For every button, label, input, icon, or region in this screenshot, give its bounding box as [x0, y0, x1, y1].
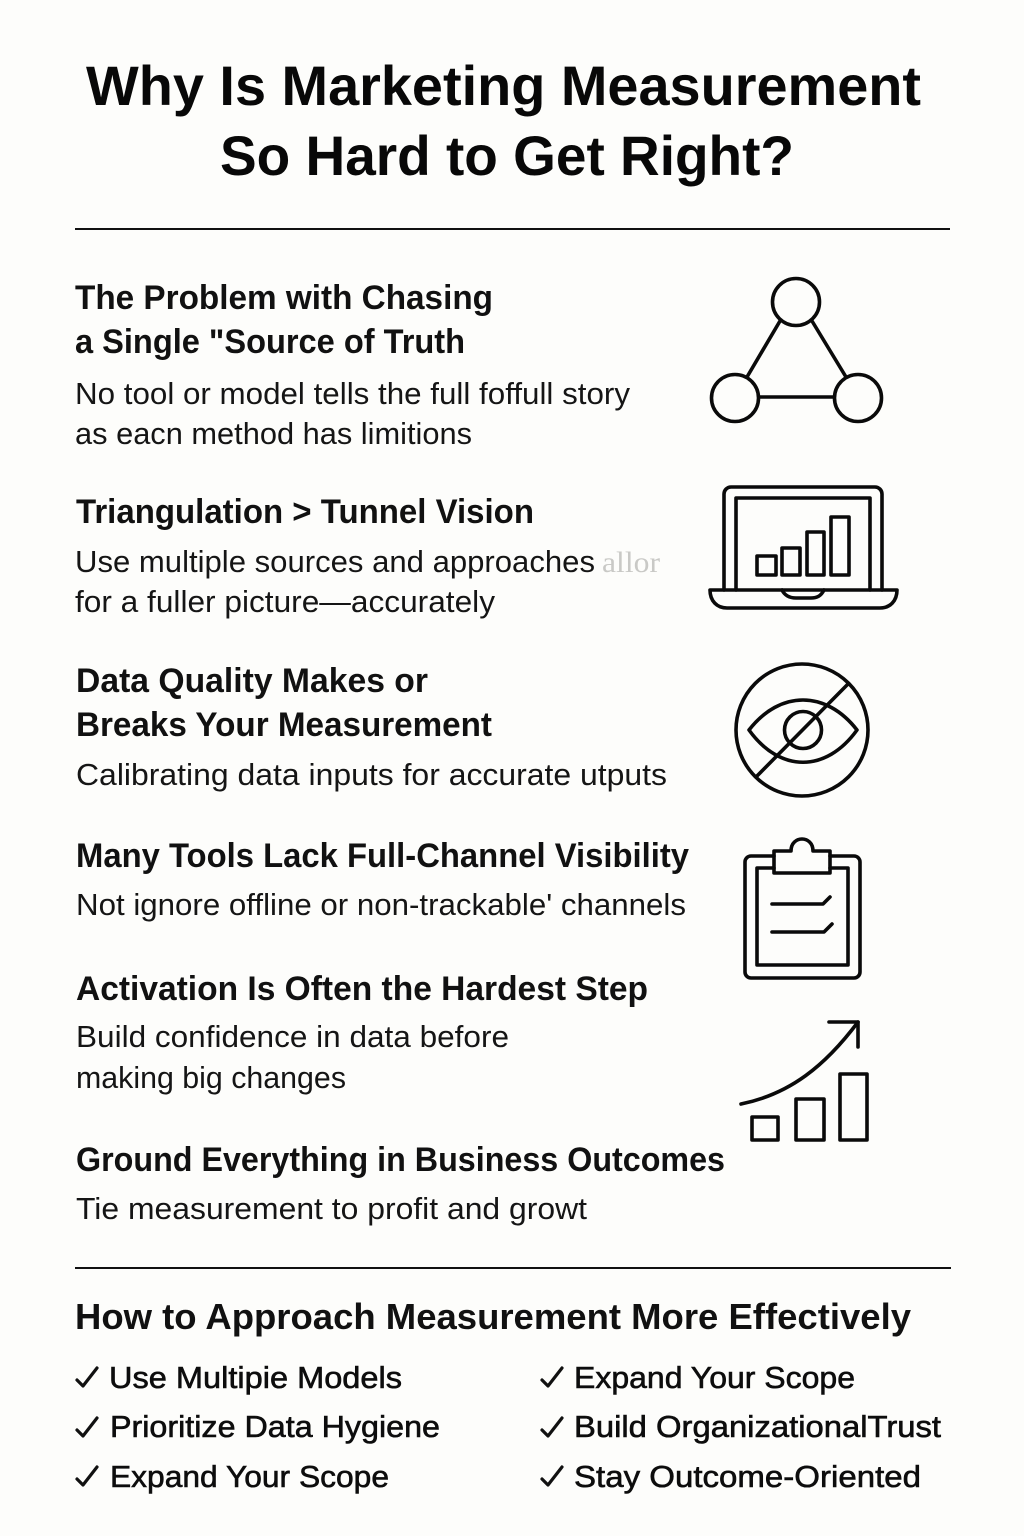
checklist item: expand your scope: Expand Your Scope [110, 1459, 389, 1494]
panel: how to approach measurement [75, 1296, 941, 1494]
title [86, 54, 921, 187]
heading: how to approach: How to Approach Measurement More Effectively [75, 1296, 911, 1337]
heading: data quality: Breaks Your Measurement [76, 706, 492, 744]
checklist item: prioritize data hygiene: Prioritize Data Hygiene [110, 1409, 440, 1444]
heading: triangulation: Triangulation > Tunnel Vision [76, 493, 534, 531]
body: full-channel visibility: Not ignore offline or non-trackable' channels [76, 887, 686, 922]
body: triangulation: for a fuller picture—accurately [75, 584, 496, 619]
body: single source of truth: No tool or model tells the full foffull story [75, 376, 630, 411]
icon: laptop with bar chart [710, 487, 897, 608]
icon: triangle network [712, 278, 882, 422]
heading: single source of truth: The Problem with Chasing [75, 279, 493, 317]
body: activation [76, 1019, 509, 1095]
section: business outcomes [76, 1141, 725, 1226]
body: triangulation [75, 544, 660, 619]
body: triangulation: Use multiple sources and approaches [75, 544, 595, 579]
body: single source of truth: as eacn method has limitions [75, 416, 472, 451]
heading: activation: Activation Is Often the Hardest Step [76, 970, 648, 1008]
checklist item: expand your scope, right column: Expand Your Scope [574, 1360, 855, 1395]
section: triangulation [75, 493, 660, 619]
heading: single source of truth [75, 279, 493, 361]
icon: growth chart with arrow [741, 1022, 867, 1140]
body: activation: Build confidence in data before [76, 1019, 509, 1054]
body: activation: making big changes [76, 1060, 346, 1095]
body: triangulation: allor [602, 546, 660, 579]
checklist item: use multiple models: Use Multipie Models [109, 1360, 402, 1395]
icon: clipboard [745, 839, 860, 978]
title: So Hard to Get Right? [220, 124, 794, 187]
checklist item: build organizational trust: Build OrganizationalTrust [574, 1409, 941, 1444]
body: data quality: Calibrating data inputs for accurate utputs [76, 757, 667, 792]
heading: data quality: Data Quality Makes or [76, 662, 428, 700]
heading: single source of truth: a Single "Source of Truth [75, 323, 465, 361]
title: Why Is Marketing Measurement [86, 54, 921, 117]
section: data quality [76, 662, 667, 792]
heading: data quality [76, 662, 492, 744]
checklist item: stay outcome-oriented: Stay Outcome-Oriented [574, 1459, 921, 1494]
section: activation [76, 970, 648, 1095]
heading: business outcomes: Ground Everything in Business Outcomes [76, 1141, 725, 1179]
heading: full-channel visibility: Many Tools Lack Full-Channel Visibility [76, 837, 689, 875]
body: business outcomes: Tie measurement to profit and growt [76, 1191, 587, 1226]
body: single source of truth [75, 376, 630, 451]
icon: crossed-out eye [736, 664, 868, 796]
section: full-channel visibility [76, 837, 689, 922]
section: single source of truth [75, 279, 630, 451]
